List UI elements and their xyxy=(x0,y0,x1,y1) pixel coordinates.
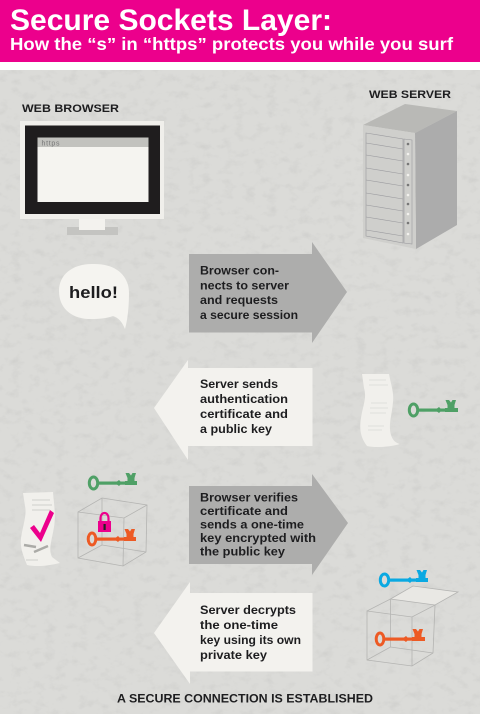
arrow: step 4 server to browser: private key xyxy=(200,648,267,662)
web browser label: WEB BROWSER xyxy=(22,103,119,115)
header banner xyxy=(0,0,480,62)
arrow: step 2 server to browser: a public key xyxy=(200,422,272,436)
arrow: step 1 browser to server: nects to server xyxy=(200,278,289,292)
arrow: step 1 browser to server: and requests xyxy=(200,293,278,307)
orange key xyxy=(88,529,136,545)
icon: verified certificate with check xyxy=(21,492,60,566)
arrow: step 1 browser to server xyxy=(189,242,347,343)
arrow: step 3 browser to server: the public key xyxy=(200,544,285,558)
arrow: step 4 server to browser: key using its own xyxy=(200,633,301,647)
arrow: step 1 browser to server: Browser con- xyxy=(200,264,279,278)
arrow: step 4 server to browser xyxy=(154,582,312,684)
hello text: hello! xyxy=(69,283,118,302)
arrow: step 3 browser to server: Browser verifies xyxy=(200,490,298,504)
icon: green key above box xyxy=(89,473,137,489)
arrow: step 2 server to browser: certificate and xyxy=(200,407,288,421)
icon: open box with orange key xyxy=(367,586,458,666)
arrow: step 3 browser to server: sends a one-time xyxy=(200,518,304,532)
icon: certificate document xyxy=(360,374,400,447)
arrow: step 2 server to browser: Server sends xyxy=(200,377,278,391)
padlock xyxy=(98,513,111,532)
address bar text: https xyxy=(42,140,60,148)
speech bubble xyxy=(59,264,129,329)
subtitle: How the “s” in “https” protects you while you surf xyxy=(10,34,453,54)
icon: locked box with orange key xyxy=(78,498,147,566)
icon: server tower xyxy=(363,104,457,249)
arrow: step 4 server to browser: Server decrypts xyxy=(200,603,296,617)
conclusion text: A SECURE CONNECTION IS ESTABLISHED xyxy=(117,694,373,706)
arrow: step 3 browser to server: key encrypted with xyxy=(200,531,316,545)
title: Secure Sockets Layer: xyxy=(10,4,332,37)
orange key xyxy=(376,629,425,645)
arrow: step 3 browser to server: certificate and xyxy=(200,504,288,518)
icon: green public key xyxy=(409,400,458,416)
arrow: step 2 server to browser: authentication xyxy=(200,392,288,406)
arrow: step 2 server to browser xyxy=(154,360,312,460)
icon: blue private key xyxy=(380,570,428,586)
arrow: step 3 browser to server xyxy=(189,474,348,575)
arrow: step 1 browser to server: a secure session xyxy=(200,308,298,322)
web server label: WEB SERVER xyxy=(369,89,451,101)
icon: browser monitor xyxy=(20,121,164,235)
arrow: step 4 server to browser: the one-time xyxy=(200,618,278,632)
check mark xyxy=(30,510,54,542)
